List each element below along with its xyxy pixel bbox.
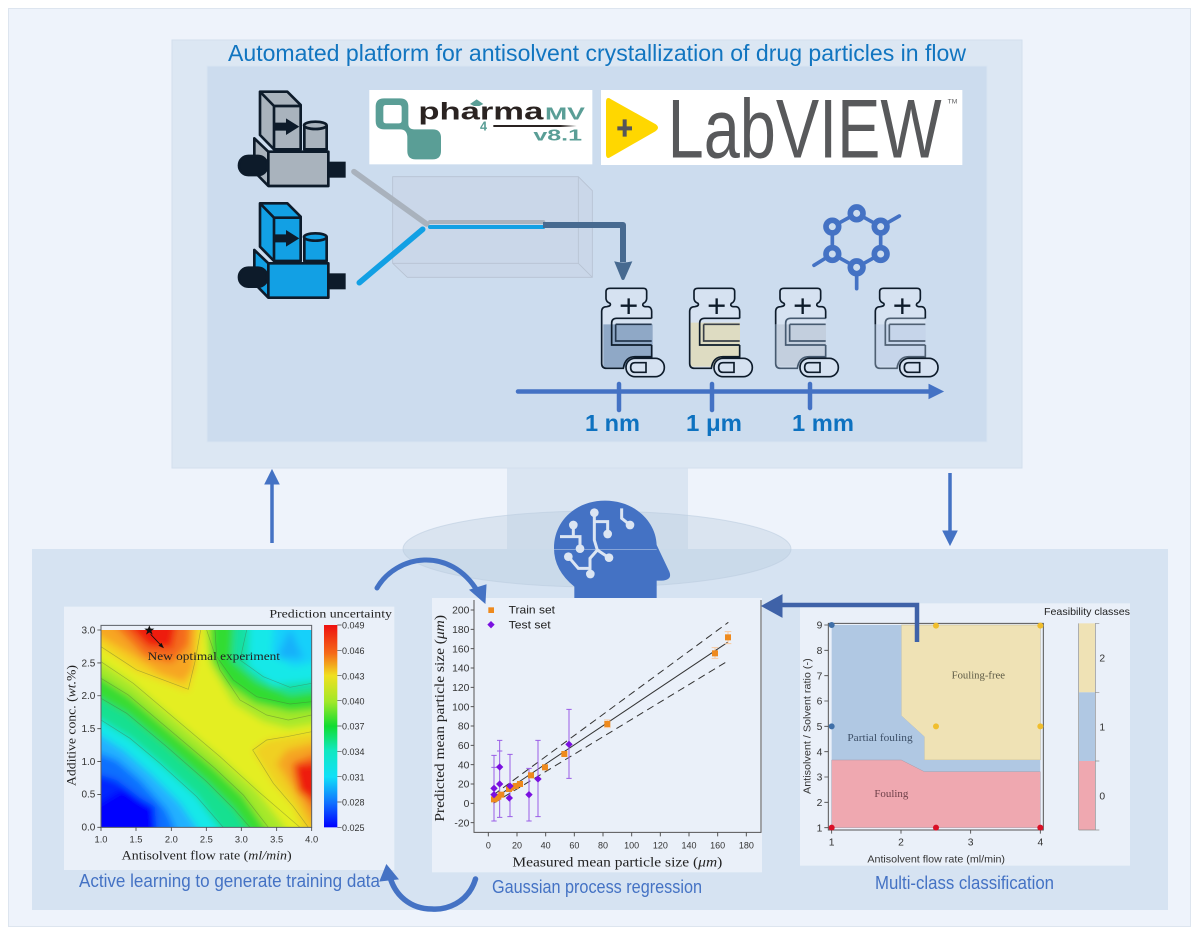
regression tick labels: 40	[541, 841, 551, 851]
colorbar: 0.037	[342, 722, 364, 732]
regression tick labels: 60	[569, 841, 579, 851]
test set points	[490, 741, 573, 802]
heat map tick labels: 0.5	[81, 790, 96, 801]
scale labels: 1 nm	[585, 410, 640, 436]
partial fouling region	[832, 625, 1040, 772]
caption: multi-class classification: Multi-class classification	[875, 873, 1054, 893]
classification frame	[828, 623, 1043, 830]
train set points	[491, 634, 731, 802]
icon: AI head	[554, 501, 670, 602]
heat map tick labels: 2.0	[165, 835, 178, 845]
colorbar	[324, 621, 364, 833]
logo: pharmaMV: v8.1	[533, 127, 583, 144]
arrow: classification to regression	[762, 595, 917, 642]
title: Automated platform for antisolvent crystallization of drug particles in flow	[228, 40, 966, 66]
panel: multi-class classification plot	[800, 603, 1130, 866]
classification tick labels: 7	[817, 671, 823, 682]
arrow: outlet to vial	[543, 225, 632, 280]
vials, molecule and size scale	[602, 207, 938, 377]
regression tick labels: 180	[739, 841, 754, 851]
heat map tick labels: 0.0	[81, 823, 96, 834]
colorbar: 0.049	[342, 621, 364, 631]
regression tick labels: 100	[624, 841, 639, 851]
panel: Gaussian process regression plot	[432, 598, 762, 872]
classification y label: Antisolvent / Solvent ratio (-)	[802, 658, 813, 794]
regression tick labels: 80	[598, 841, 608, 851]
pump system diagram	[239, 92, 592, 298]
logo: LabVIEW: TM	[948, 98, 957, 105]
logo: pharmaMV: 4	[480, 120, 487, 134]
plot frame and ticks	[101, 625, 312, 827]
classification x label: Antisolvent flow rate (ml/min)	[867, 855, 1005, 866]
regression tick labels: 120	[452, 683, 470, 694]
icon: grey pump	[239, 92, 346, 186]
monitor stand	[507, 468, 688, 550]
icon: vial 3	[776, 288, 838, 377]
regression tick labels: 100	[452, 702, 470, 713]
colorbar title: Prediction uncertainty	[269, 606, 392, 620]
classification tick labels: 6	[817, 697, 823, 708]
regression y label: Predicted mean particle size (μm)	[433, 615, 448, 822]
regression tick labels: 140	[452, 664, 470, 675]
regression tick labels: 40	[458, 760, 470, 771]
heat map tick labels: 4.0	[305, 835, 318, 845]
feasibility colorbar: 2	[1099, 653, 1105, 664]
legend	[487, 605, 556, 632]
colorbar: 0.028	[342, 798, 364, 808]
flow chip	[393, 177, 592, 277]
heat map tick labels: 2.0	[81, 691, 96, 702]
region labels: Partial fouling	[847, 733, 913, 744]
caption: gaussian process regression: Gaussian process regression	[492, 877, 702, 897]
heat map tick labels: 1.5	[130, 835, 142, 845]
heat map tick labels: 2.5	[200, 835, 213, 845]
regression tick labels: 160	[452, 644, 470, 655]
legend: Train set	[509, 605, 556, 617]
size scale axis arrow	[518, 384, 943, 410]
plot axes	[471, 600, 761, 836]
fouling-free region	[901, 625, 1040, 760]
heat map x label: Antisolvent flow rate ( ml/min)	[122, 848, 292, 862]
optimal experiment annotation: New optimal experiment	[148, 649, 281, 663]
scale labels	[585, 410, 854, 436]
classification tick labels	[817, 621, 1043, 849]
logo: pharmaMV: MV	[545, 103, 585, 123]
regression tick labels: 80	[458, 722, 470, 733]
regression tick labels: 0	[486, 841, 491, 851]
colorbar: 0.031	[342, 772, 364, 782]
icon: optimal experiment star	[144, 625, 154, 635]
icon: blue pump	[239, 203, 346, 298]
region labels	[847, 670, 1005, 800]
regression tick labels: 20	[458, 780, 470, 791]
heat map surface	[102, 630, 312, 827]
classification ticks	[824, 625, 1040, 834]
icon: vial 4	[875, 288, 938, 377]
heat map tick labels: 3.5	[270, 835, 283, 845]
logo: LabVIEW: LabVIEW	[668, 83, 942, 176]
arrow: active learning to regression	[377, 560, 486, 603]
icon: vial 2	[690, 288, 752, 377]
arrow: model to platform	[265, 470, 279, 543]
classification tick labels: 4	[817, 747, 823, 758]
monitor base ellipse	[403, 511, 791, 587]
parity lines	[493, 622, 728, 803]
heat map y label: Additive conc. (wt.%)	[64, 665, 78, 786]
heat map tick labels: 2.5	[81, 658, 96, 669]
classification tick labels: 2	[817, 798, 823, 809]
arrow: platform to model	[943, 473, 957, 545]
panel: machine learning models	[32, 549, 1168, 910]
heat map tick labels: 3.0	[81, 625, 96, 636]
icon: vial 1	[602, 288, 664, 377]
fouling region	[832, 760, 1040, 828]
regression tick labels: 0	[464, 799, 470, 810]
region labels: Fouling	[874, 789, 909, 800]
region labels: Fouling-free	[952, 670, 1005, 681]
colorbar: 0.040	[342, 696, 364, 706]
regression tick labels: -20	[454, 818, 470, 829]
heat map tick labels: 1.0	[95, 835, 107, 845]
heat map tick labels: 3.0	[235, 835, 248, 845]
regression x label: Measured mean particle size ( μm)	[512, 856, 723, 871]
panel: active learning heat map	[64, 600, 394, 870]
train set error bars	[604, 632, 731, 728]
test set error bars	[491, 709, 572, 821]
regression tick labels: 140	[681, 841, 696, 851]
regression tick labels: 120	[653, 841, 668, 851]
feasibility colorbar: 1	[1099, 722, 1105, 733]
colorbar: 0.043	[342, 671, 364, 681]
classification tick labels: 5	[817, 722, 823, 733]
feasibility colorbar	[1079, 623, 1105, 830]
regression tick labels: 180	[452, 625, 470, 636]
panel: automated platform monitor	[172, 40, 1022, 468]
scale labels: 1 μm	[686, 410, 742, 436]
colorbar: 0.025	[342, 823, 364, 833]
feasibility colorbar: 0	[1099, 791, 1105, 802]
logo: pharmaMV: pharma	[418, 98, 544, 125]
optimal experiment arrow	[151, 634, 164, 648]
classification tick labels: 3	[817, 773, 823, 784]
classification tick labels: 9	[817, 621, 823, 632]
scale labels: 1 mm	[792, 410, 854, 436]
classification tick labels: 2	[898, 838, 904, 849]
feasibility title: Feasibility classes	[1044, 607, 1130, 618]
classification tick labels: 1	[817, 823, 823, 834]
regression tick labels: 60	[458, 741, 470, 752]
regression tick labels: 160	[710, 841, 725, 851]
icon: molecule	[814, 207, 899, 289]
classification tick labels: 1	[829, 838, 835, 849]
arrow: regression to active learning	[380, 865, 476, 909]
classification tick labels: 4	[1037, 838, 1043, 849]
heat map tick labels: 1.0	[81, 757, 96, 768]
logo: pharmaMV	[369, 90, 592, 164]
legend: Test set	[509, 620, 552, 632]
experiment points	[829, 622, 1043, 831]
heat map tick labels	[81, 625, 318, 845]
colorbar: 0.034	[342, 747, 364, 757]
regression tick labels: 200	[452, 606, 470, 617]
classification tick labels: 3	[968, 838, 974, 849]
regression tick labels	[452, 606, 754, 851]
regression tick labels: 20	[512, 841, 522, 851]
colorbar: 0.046	[342, 646, 364, 656]
flow lines	[354, 172, 543, 283]
heat map tick labels: 1.5	[81, 724, 96, 735]
caption: active learning: Active learning to generate training data	[79, 871, 381, 891]
classification tick labels: 8	[817, 646, 823, 657]
